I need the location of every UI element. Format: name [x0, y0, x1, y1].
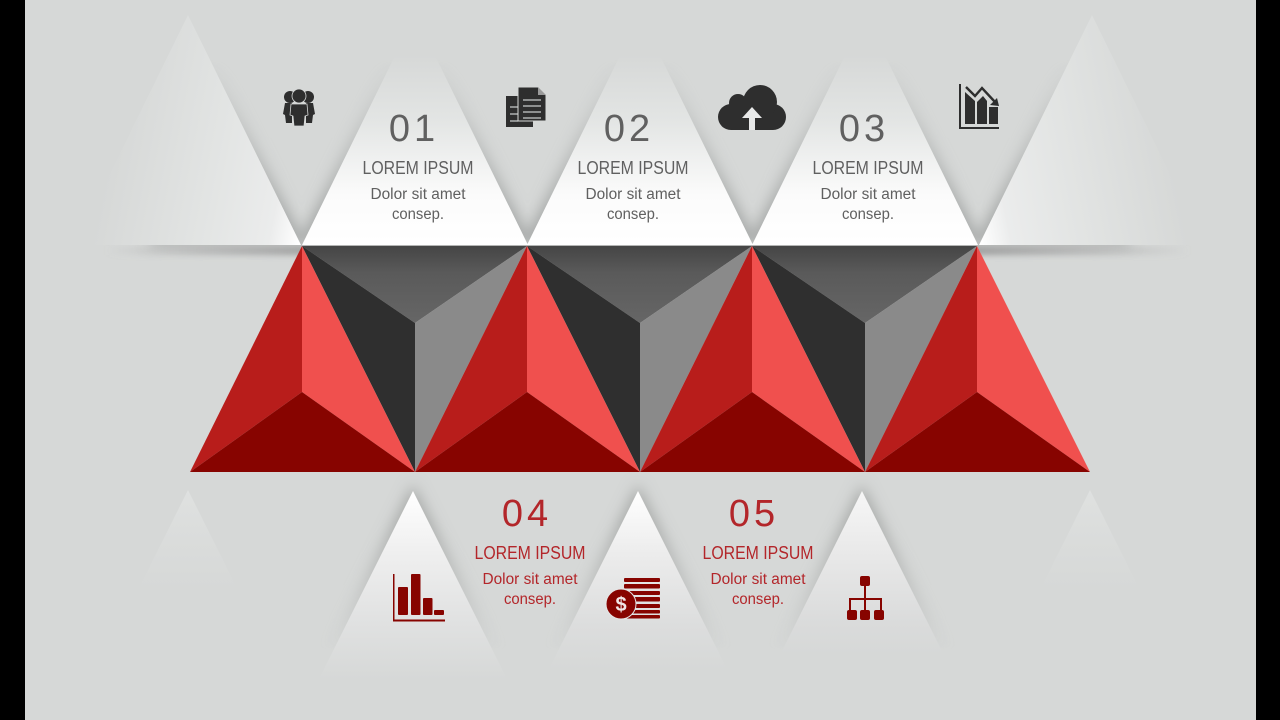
icon: falling chart: [960, 84, 999, 128]
horizontal shadow band: [105, 246, 1190, 255]
icon: hierarchy: [847, 576, 884, 620]
bottom triangle shadows: [349, 484, 926, 618]
dark triangle 3: [752, 246, 977, 472]
central red triangles: [190, 246, 1090, 472]
bottom triangle 1: [313, 491, 513, 691]
text block 03: consep.: [842, 206, 894, 223]
dark triangle 1: [302, 246, 527, 472]
text block 02: Dolor sit amet: [586, 186, 681, 203]
text block 03: LOREM IPSUM: [812, 158, 924, 178]
faint right triangle: [1025, 490, 1155, 620]
text block 02: consep.: [607, 206, 659, 223]
bottom triangle 3: [774, 491, 950, 667]
text block 01: 01: [389, 108, 439, 150]
text block 05: LOREM IPSUM: [702, 543, 814, 563]
bottom triangle 2: [543, 491, 733, 681]
text block 03: 03: [839, 108, 889, 150]
triangle 01: [302, 15, 528, 245]
text block 04: LOREM IPSUM: [474, 543, 586, 563]
left faded triangle: [75, 15, 301, 245]
faint left triangle: [123, 490, 253, 620]
text block 02: 02: [604, 108, 654, 150]
red triangle 2: [415, 246, 640, 472]
top row of white triangles: [138, 46, 1148, 250]
central dark inverted triangles: [302, 246, 977, 472]
text block 05: [702, 493, 814, 608]
triangle shadows: [150, 98, 1130, 250]
left black bar: [0, 0, 25, 720]
text block 01: consep.: [392, 206, 444, 223]
text block 04: [474, 493, 586, 608]
text block 02: [578, 108, 688, 223]
right faded triangle: [979, 15, 1205, 245]
bottom row of triangles: [184, 484, 1094, 634]
icon: documents: [506, 87, 546, 127]
icon: bar chart: [393, 574, 445, 622]
text block 02: LOREM IPSUM: [578, 158, 688, 178]
text block 01: Dolor sit amet: [370, 186, 466, 203]
dark triangle 2: [527, 246, 752, 472]
icon: cloud upload: [718, 85, 786, 130]
text block 04: Dolor sit amet: [482, 571, 578, 588]
text block 05: consep.: [732, 591, 784, 608]
text block 05: Dolor sit amet: [710, 571, 806, 588]
right black bar: [1256, 0, 1280, 720]
red triangle 1: [190, 246, 415, 472]
red triangle 3: [640, 246, 865, 472]
triangle 03: [752, 15, 978, 245]
text block 01: LOREM IPSUM: [362, 158, 474, 178]
icon: coins: [606, 578, 660, 619]
triangle 02: [527, 15, 753, 245]
text block 04: 04: [502, 493, 552, 535]
icon: people: [283, 89, 315, 126]
text block 04: consep.: [504, 591, 556, 608]
red triangle 4: [865, 246, 1090, 472]
text block 05: 05: [729, 493, 779, 535]
text block 01: [362, 108, 474, 223]
icon: coins: $: [615, 594, 627, 616]
text block 03: Dolor sit amet: [820, 186, 916, 203]
text block 03: [812, 108, 924, 223]
